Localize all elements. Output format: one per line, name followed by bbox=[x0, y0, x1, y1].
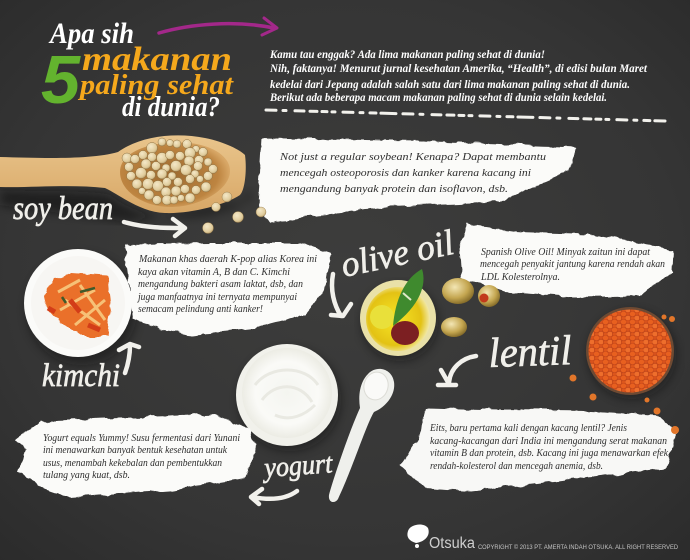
icon: yogurt bowl bbox=[236, 344, 341, 451]
label: soy bean: soy bean bbox=[13, 191, 113, 227]
panel: olive oil note: mencegah penyakit jantung karena rendah akan bbox=[480, 259, 665, 270]
icon: olives bbox=[441, 278, 500, 337]
arrow: soy bean bbox=[124, 219, 185, 236]
panel: lentil note: rendah-kolesterol dan mencegah anemia, dsb. bbox=[430, 460, 603, 472]
intro text: Nih, faktanya! Menurut jurnal kesehatan Amerika, “Health”, di edisi bulan Maret bbox=[269, 63, 648, 75]
panel: lentil note bbox=[400, 408, 678, 491]
panel: olive oil note: Spanish Olive Oil! Minyak zaitun ini dapat bbox=[481, 247, 650, 258]
arrow: yogurt bbox=[251, 489, 297, 504]
label: olive oil: olive oil bbox=[337, 222, 457, 285]
logo: Otsuka: Otsuka bbox=[429, 535, 475, 552]
title: Apa sih bbox=[48, 17, 134, 50]
panel: lentil note: kacang-kacangan dari India ini mengandung serat makanan bbox=[430, 435, 667, 447]
title: makanan bbox=[82, 41, 232, 78]
arrow: olive oil bbox=[331, 274, 351, 316]
panel: soy bean note: mencegah osteoporosis dan kanker karena kacang ini bbox=[280, 167, 531, 179]
panel: soy bean note: Not just a regular soybean! Kenapa? Dapat membantu bbox=[279, 151, 547, 163]
panel: lentil note: Eits, baru pertama kali dengan kacang lentil? Jenis bbox=[429, 422, 627, 434]
icon: wooden spoon with soybeans bbox=[0, 135, 250, 222]
intro text: kedelai dari Jepang adalah salah satu dari lima makanan paling sehat di dunia. bbox=[270, 79, 630, 91]
title: di dunia? bbox=[122, 92, 220, 123]
title bbox=[41, 17, 234, 123]
intro text bbox=[269, 49, 648, 104]
panel: yogurt note: tulang yang kuat, dsb. bbox=[43, 470, 130, 481]
icon: loose lentils bbox=[570, 314, 675, 414]
panel: yogurt note: ini menawarkan banyak bentuk kesehatan untuk bbox=[43, 445, 228, 456]
arrow: lentil bbox=[438, 356, 476, 385]
title: 5 bbox=[41, 42, 81, 118]
arrow: purple pointing to intro bbox=[159, 18, 277, 35]
label: yogurt: yogurt bbox=[261, 448, 334, 484]
circle: loose lentil on note bbox=[671, 426, 679, 434]
arrow: kimchi bbox=[119, 344, 139, 373]
icon: lentil bowl bbox=[586, 307, 676, 399]
panel: kimchi note: juga manfaatnya ini ternyata mempunyai bbox=[136, 292, 297, 303]
chalk dashed divider bbox=[266, 110, 665, 121]
panel: kimchi note: semacam pelindung anti kanker! bbox=[138, 304, 263, 315]
panel: kimchi note: mengandung bakteri asam laktat, dsb, dan bbox=[138, 279, 303, 290]
panel: olive oil note: LDL Kolesterolnya. bbox=[480, 272, 560, 283]
icon: kimchi plate bbox=[24, 249, 137, 365]
panel: olive oil note bbox=[459, 224, 673, 297]
label: kimchi: kimchi bbox=[42, 358, 120, 394]
panel: yogurt note: usus, menambah kekebalan dan pembentukkan bbox=[43, 458, 222, 469]
panel: yogurt note bbox=[15, 414, 256, 497]
icon: loose soybeans bbox=[202, 192, 266, 234]
panel: yogurt note: Yogurt equals Yummy! Susu fermentasi dari Yunani bbox=[43, 433, 240, 444]
label: lentil: lentil bbox=[488, 328, 572, 377]
panel: kimchi note: Makanan khas daerah K-pop alias Korea ini bbox=[138, 254, 317, 265]
panel: soy bean note bbox=[258, 138, 578, 222]
title: paling sehat bbox=[78, 70, 234, 101]
panel: kimchi note bbox=[124, 243, 331, 335]
icon: olive oil bowl bbox=[360, 269, 438, 361]
intro text: Kamu tau enggak? Ada lima makanan paling sehat di dunia! bbox=[269, 49, 545, 61]
panel: kimchi note: kaya akan vitamin A, B dan C. Kimchi bbox=[138, 267, 290, 278]
panel: soy bean note: mengandung banyak protein dan isoflavon, dsb. bbox=[280, 183, 508, 195]
logo: Otsuka bbox=[407, 524, 475, 552]
intro text: Berikut ada beberapa macam makanan paling sehat di dunia selain kedelai. bbox=[269, 92, 607, 104]
icon: yogurt spoon bbox=[329, 369, 394, 502]
